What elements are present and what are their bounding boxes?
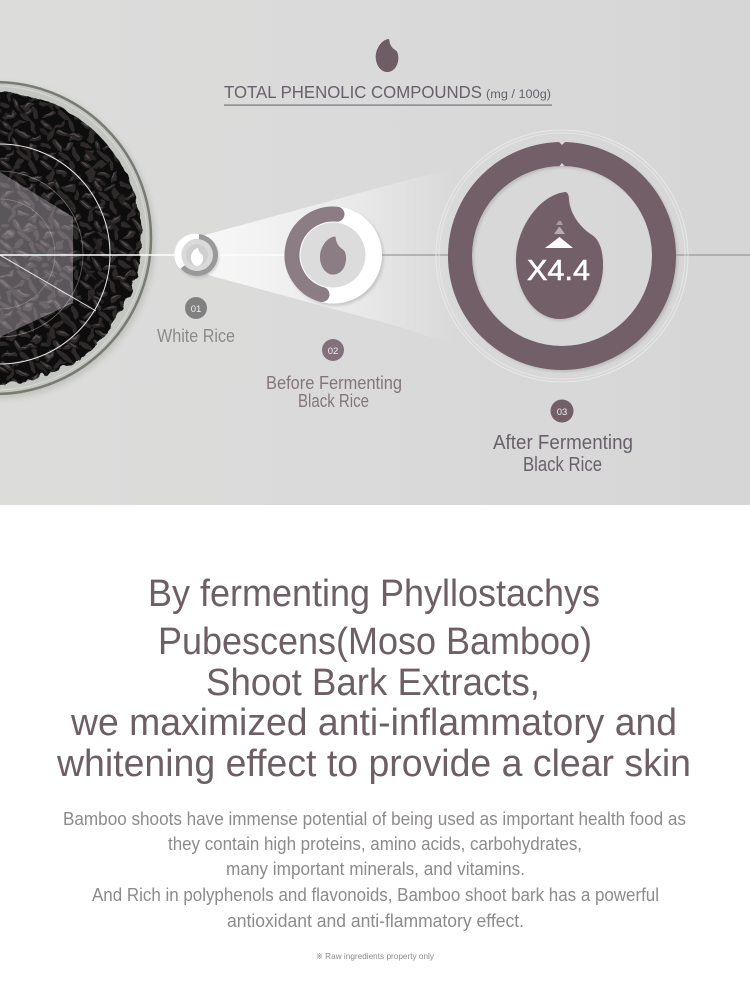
- main heading: Shoot Bark Extracts,: [206, 662, 540, 704]
- body paragraph: [63, 809, 686, 931]
- footnote: ※ Raw ingredients property only: [316, 951, 435, 961]
- title underline: [224, 104, 552, 106]
- up arrows: [545, 221, 573, 248]
- label: After Fermenting Black Rice: After Fermenting: [493, 432, 633, 454]
- label: Before Fermenting Black Rice: Before Fermenting: [266, 373, 402, 393]
- main heading: By fermenting Phyllostachys: [148, 573, 600, 615]
- light cone between circles: [205, 168, 455, 345]
- photo: bowl of black rice: [0, 82, 160, 399]
- badge: 03: [550, 400, 574, 422]
- body paragraph: antioxidant and anti-flammatory effect.: [227, 911, 524, 931]
- overlay: translucent hexagon on rice: [0, 172, 73, 337]
- rice grain in ring: [516, 192, 603, 319]
- badge: 02: [322, 339, 344, 361]
- circle 2: before fermenting: [285, 206, 384, 306]
- chart title: TOTAL PHENOLIC COMPOUNDS: [224, 82, 482, 102]
- label: After Fermenting Black Rice: [493, 432, 633, 476]
- circle 1: white rice: [174, 234, 219, 278]
- grey top panel background: [0, 0, 750, 505]
- body paragraph: Bamboo shoots have immense potential of being used as important health food as: [63, 809, 686, 829]
- label: Before Fermenting Black Rice: [266, 373, 402, 411]
- notch at top of ring: [559, 142, 565, 166]
- main heading: Pubescens(Moso Bamboo): [158, 621, 592, 663]
- circle 3: after fermenting: [436, 130, 688, 382]
- chart title: (mg / 100g): [486, 89, 551, 101]
- badge: 01: [185, 297, 207, 319]
- badge: 01: 01: [191, 304, 201, 315]
- body paragraph: many important minerals, and vitamins.: [226, 859, 525, 879]
- connector line: bowl to circle 1: [0, 254, 178, 256]
- connector line: circle 1 to circle 2: [218, 254, 286, 256]
- badge: 03: 03: [557, 407, 567, 418]
- connector line: circle 3 to right edge: [675, 254, 750, 256]
- body paragraph: they contain high proteins, amino acids, carbohydrates,: [168, 834, 582, 854]
- multiplier value: X4.4: [527, 255, 590, 287]
- white bottom panel: [0, 505, 750, 1000]
- main heading: whitening effect to provide a clear skin: [56, 743, 691, 785]
- badge: 02: 02: [328, 346, 338, 357]
- body paragraph: And Rich in polyphenols and flavonoids, Bamboo shoot bark has a powerful: [92, 885, 659, 905]
- label: Before Fermenting Black Rice: Black Rice: [298, 391, 369, 411]
- label: After Fermenting Black Rice: Black Rice: [523, 454, 602, 476]
- label: White Rice: White Rice: [157, 326, 235, 346]
- connector line: circle 2 to circle 3: [382, 254, 448, 256]
- icon: rice grain above title: [376, 39, 398, 72]
- main heading: [56, 573, 691, 785]
- overlay: thin target circles on rice: [0, 144, 110, 364]
- main heading: we maximized anti-inflammatory and: [70, 702, 677, 744]
